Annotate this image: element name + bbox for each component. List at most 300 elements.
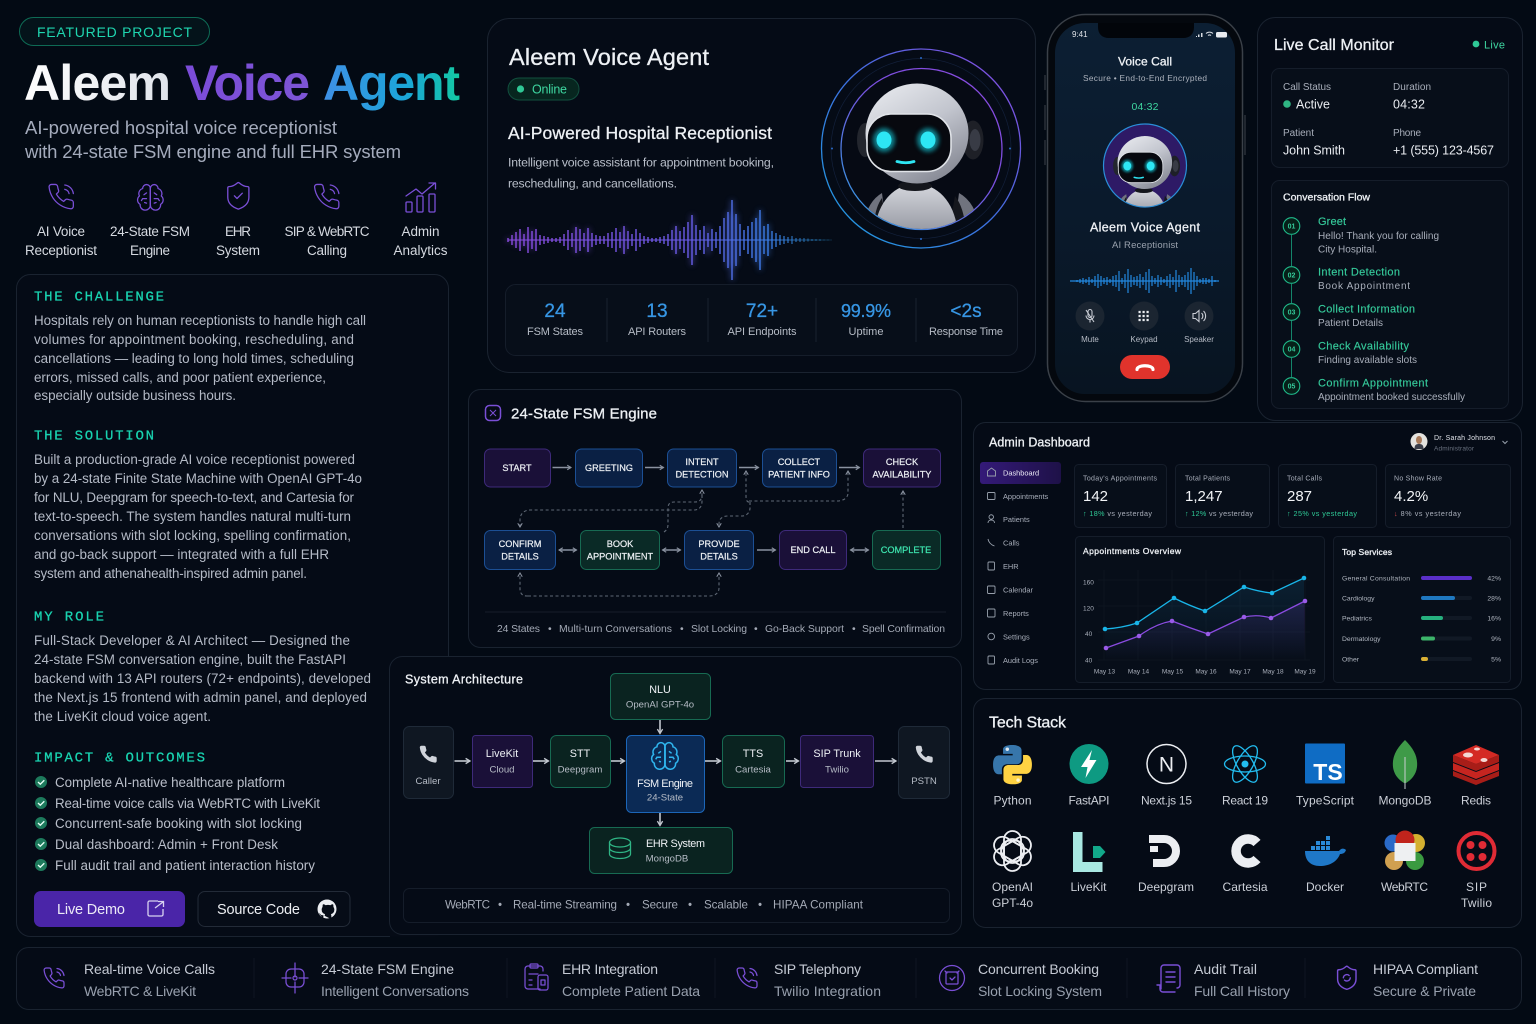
step 03 <box>1283 304 1415 329</box>
step 02: 02 <box>1288 272 1295 280</box>
list: outcomes: Full audit trail and patient interaction history <box>55 858 315 873</box>
state: check availability: CHECK <box>886 457 919 467</box>
sidebar: Dashboard <box>1003 468 1039 478</box>
chart: top services: 16% <box>1487 616 1501 622</box>
item: SIP telephony: Twilio Integration <box>774 983 881 999</box>
state: book appointment <box>580 530 660 570</box>
title: Voice <box>185 55 310 111</box>
label: FSM engine: Engine <box>130 243 170 258</box>
label: AI voice receptionist: Receptionist <box>25 243 97 258</box>
chart: top services <box>1334 536 1510 682</box>
call details: +1 (555) 123-4567 <box>1393 144 1494 158</box>
feature strip: Slot Locking <box>691 624 747 635</box>
feature strip: WebRTC <box>445 898 490 912</box>
Cartesia <box>1222 839 1268 894</box>
call header: Secure • End-to-End Encrypted <box>1083 73 1207 83</box>
icon: analytics <box>406 183 436 212</box>
stat: total calls: ↑ 25% vs yesterday <box>1287 509 1357 518</box>
step 02: Intent Detection <box>1318 266 1400 278</box>
step 01 <box>1283 216 1439 256</box>
label: SIP and WebRTC: Calling <box>307 243 347 258</box>
LiveKit: LiveKit <box>1070 880 1107 894</box>
OpenAI <box>991 831 1034 910</box>
list: outcomes: Real-time voice calls via WebRTC with LiveKit <box>55 796 320 811</box>
icon: FSM brain <box>138 185 163 210</box>
Twilio: Twilio <box>1461 896 1492 910</box>
Twilio: SIP <box>1466 880 1487 894</box>
text: solution body: text-to-speech. The system handles natural multi-turn <box>34 509 351 524</box>
panel: project narrative <box>16 274 448 936</box>
OpenAI: GPT-4o <box>992 896 1033 910</box>
chart: appointments overview: May 16 <box>1195 668 1217 676</box>
sidebar: Appointments <box>1003 492 1048 501</box>
node: NLU: NLU <box>649 684 671 696</box>
agent label: AI Receptionist <box>1112 240 1178 251</box>
node: STT: Deepgram <box>558 764 602 776</box>
control: mute: Mute <box>1081 335 1099 344</box>
stat: today's appointments: Today's Appointments <box>1083 476 1158 482</box>
step 04 <box>1283 340 1417 366</box>
stat: total patients: 1,247 <box>1185 488 1223 505</box>
panel: stats: API Endpoints <box>728 326 797 338</box>
item: FSM engine: Intelligent Conversations <box>321 983 469 999</box>
step 05: 05 <box>1288 384 1295 390</box>
feature strip: Real-time Streaming <box>513 898 617 912</box>
label: EHR system: EHR <box>225 224 251 239</box>
node: FSM engine: 24-State <box>647 792 683 804</box>
state: check availability: AVAILABILITY <box>873 470 931 480</box>
Redis <box>1453 745 1499 808</box>
call details: Active <box>1296 98 1330 112</box>
stat: no show rate <box>1386 464 1510 528</box>
call controls <box>1076 302 1214 344</box>
call details <box>1272 68 1508 168</box>
item: audit trail <box>1157 961 1290 999</box>
state: start <box>484 449 550 487</box>
stat: today's appointments: ↑ 18% vs yesterday <box>1083 509 1152 518</box>
chart: appointments overview: May 18 <box>1262 668 1284 676</box>
icon: database <box>610 838 630 858</box>
stat: total patients: Total Patients <box>1185 476 1230 482</box>
text: challenge body: especially outside business hours. <box>34 388 236 403</box>
button: source code <box>198 892 350 926</box>
label: admin analytics <box>394 224 448 258</box>
subtitle <box>24 117 401 162</box>
node: EHR system: EHR System <box>646 838 705 850</box>
node: STT <box>550 736 610 788</box>
subtitle: with 24-state FSM engine and full EHR system <box>24 141 401 162</box>
node: SIP trunk: Twilio <box>825 764 849 776</box>
stat: total calls: Total Calls <box>1287 476 1322 482</box>
call header: 04:32 <box>1132 101 1159 113</box>
panel: stats: Response Time <box>929 326 1003 338</box>
item: SIP telephony <box>737 961 881 999</box>
call details: Patient <box>1283 128 1314 139</box>
WebRTC <box>1381 830 1428 894</box>
state: start: START <box>502 463 532 473</box>
node: STT: STT <box>570 748 591 760</box>
text: role body: the Next.js 15 frontend with admin panel, and deployed <box>34 690 367 705</box>
Docker: Docker <box>1306 880 1344 894</box>
node: PSTN <box>898 726 950 798</box>
feature strip: • <box>626 898 630 912</box>
text: challenge body: errors, missed calls, and poor patient experience, <box>34 370 326 385</box>
state: complete: COMPLETE <box>881 545 931 555</box>
featured project badge <box>20 18 210 46</box>
text: role body: the LiveKit cloud voice agent. <box>34 709 211 724</box>
node: SIP trunk <box>800 736 874 788</box>
stat: today's appointments <box>1074 464 1166 528</box>
label: FSM engine: 24-State FSM <box>110 224 190 239</box>
chart: appointments overview <box>1076 536 1324 682</box>
feature strip: • <box>680 624 684 635</box>
live indicator: Live <box>1484 40 1505 52</box>
feature strip: Spell Confirmation <box>862 624 945 635</box>
label: EHR system: System <box>216 243 260 258</box>
text: solution body: and go-back support — integrated with a full EHR <box>34 547 329 562</box>
agent label <box>1090 220 1201 251</box>
panel: admin dashboard <box>974 422 1522 690</box>
state: collect patient info: COLLECT <box>778 457 821 467</box>
sidebar: Patients <box>1003 515 1030 524</box>
LiveKit <box>1070 832 1107 894</box>
node: TTS: TTS <box>743 748 763 760</box>
stat: no show rate: No Show Rate <box>1394 476 1442 482</box>
feature strip: Multi-turn Conversations <box>559 624 672 635</box>
item: EHR integration <box>525 961 700 999</box>
state: provide details <box>684 530 754 570</box>
node: EHR system: MongoDB <box>646 854 688 864</box>
chart: appointments overview: 120 <box>1083 606 1094 612</box>
conversation flow: Conversation Flow <box>1283 192 1370 204</box>
feature strip: Secure <box>642 898 678 912</box>
stat: response time: <2s <box>950 301 982 322</box>
item: FSM engine <box>282 961 469 999</box>
control: keypad: Keypad <box>1130 335 1158 344</box>
state: greeting: GREETING <box>585 463 633 473</box>
user profile: Dr. Sarah Johnson <box>1434 435 1495 442</box>
heading: my role: MY ROLE <box>34 610 104 626</box>
chart: top services: 42% <box>1487 576 1501 582</box>
TypeScript: TypeScript <box>1296 794 1355 808</box>
state: end call: END CALL <box>791 545 835 555</box>
call details: John Smith <box>1283 144 1345 158</box>
agent label: Aleem Voice Agent <box>1090 220 1201 234</box>
text: solution body: conversations with slot locking, spelling confirmation, <box>34 528 351 543</box>
panel: live call monitor <box>1258 18 1522 420</box>
list: outcomes <box>35 775 320 873</box>
chart: top services: General Consultation <box>1342 576 1410 582</box>
icon: github <box>318 900 336 919</box>
stat: no show rate: ↓ 8% vs yesterday <box>1394 509 1461 518</box>
item: concurrent booking: Concurrent Booking <box>978 961 1099 977</box>
item: HIPAA compliant <box>1338 961 1478 999</box>
panel: hero agent card <box>488 18 1036 372</box>
stat: API routers: 13 <box>646 301 668 322</box>
panel: stats: API Routers <box>628 326 686 338</box>
node: NLU: OpenAI GPT-4o <box>626 700 694 710</box>
feature strip: • <box>754 624 758 635</box>
label: SIP and WebRTC <box>284 224 370 258</box>
FastAPI: FastAPI <box>1068 794 1110 808</box>
call details: Call Status <box>1283 82 1331 93</box>
chart: appointments overview: May 17 <box>1229 668 1251 676</box>
call header <box>1083 54 1207 113</box>
stat: uptime: 99.9% <box>841 301 891 321</box>
panel: stats: Uptime <box>848 326 884 338</box>
Docker <box>1305 836 1346 894</box>
control: speaker: Speaker <box>1184 335 1214 344</box>
chart: appointments overview: 40 <box>1085 631 1093 638</box>
chart: appointments overview: 40 <box>1085 658 1093 664</box>
text: solution body <box>34 452 362 581</box>
subtitle: AI-powered hospital voice receptionist <box>25 117 337 138</box>
state: provide details: PROVIDE <box>698 539 740 549</box>
title: Aleem <box>24 55 171 111</box>
Next.js <box>1141 744 1192 808</box>
text: description: rescheduling, and cancellations. <box>508 176 677 190</box>
user profile: Administrator <box>1434 446 1475 452</box>
feature strip: • <box>852 624 856 635</box>
badge: online <box>508 78 579 100</box>
text: challenge body <box>34 313 366 403</box>
feature strip: • <box>758 898 762 912</box>
step 03: 03 <box>1288 310 1295 316</box>
state: confirm details: DETAILS <box>501 552 539 562</box>
text: role body: backend with 13 API routers (72+ endpoints), developed <box>34 671 371 686</box>
state: intent detection: DETECTION <box>675 470 729 480</box>
python <box>993 745 1032 808</box>
node: PSTN: PSTN <box>911 776 937 787</box>
item: HIPAA compliant: HIPAA Compliant <box>1373 961 1478 977</box>
waveform <box>508 200 832 280</box>
chart: top services: 9% <box>1491 636 1501 643</box>
call details: Duration <box>1393 82 1431 93</box>
step 05: Confirm Appointment <box>1318 378 1428 390</box>
icon: EHR shield <box>228 183 249 209</box>
item: voice calls <box>44 961 215 999</box>
hang up button <box>1120 355 1170 379</box>
Cartesia: Cartesia <box>1222 880 1268 894</box>
feature strip: HIPAA Compliant <box>773 898 864 912</box>
label: FSM engine <box>110 224 190 258</box>
feature strip: • <box>498 898 502 912</box>
button: live demo <box>34 891 185 927</box>
button: source code: Source Code <box>217 902 300 918</box>
step 05 <box>1283 378 1465 403</box>
state: end call <box>780 530 846 570</box>
text: solution body: by a 24-state Finite State Machine with OpenAI GPT-4o <box>34 471 362 486</box>
step 02: Book Appointment <box>1318 281 1410 292</box>
state: complete <box>872 530 940 570</box>
text: role body: 24-state FSM conversation engine, built the FastAPI <box>34 652 346 667</box>
node: TTS <box>722 736 784 788</box>
feature strip <box>485 612 946 635</box>
chart: appointments overview: May 15 <box>1162 668 1184 676</box>
step 04: Check Availability <box>1318 340 1410 352</box>
text: challenge body: volumes for appointment booking, rescheduling, and <box>34 332 354 347</box>
featured project badge: FEATURED PROJECT <box>37 24 192 40</box>
item: HIPAA compliant: Secure & Private <box>1373 983 1476 999</box>
chart: top services: 5% <box>1491 656 1501 664</box>
node: caller: Caller <box>415 776 441 787</box>
arrows: dashed go-back transitions <box>520 471 903 596</box>
text: challenge body: Hospitals rely on human receptionists to handle high call <box>34 313 366 328</box>
step 03: Patient Details <box>1318 318 1383 329</box>
sidebar: EHR <box>1003 562 1019 571</box>
heading: Live Call Monitor <box>1274 37 1395 54</box>
step 01: Hello! Thank you for calling <box>1318 231 1439 242</box>
state: intent detection: INTENT <box>685 457 719 467</box>
feature strip: 24 States <box>497 624 540 635</box>
Next.js: N <box>1159 754 1174 776</box>
panel: feature bar <box>16 948 1522 1010</box>
TypeScript <box>1296 744 1355 808</box>
Twilio <box>1458 833 1494 910</box>
panel: stats: FSM States <box>527 326 584 338</box>
feature strip <box>404 888 950 922</box>
heading: Tech Stack <box>989 714 1067 732</box>
subheading: AI-Powered Hospital Receptionist <box>508 123 772 143</box>
panel: FSM engine <box>468 390 962 648</box>
feature strip: Go-Back Support <box>765 624 844 635</box>
list: outcomes: Concurrent-safe booking with slot locking <box>55 816 302 831</box>
sidebar: Calls <box>1003 538 1020 548</box>
item: FSM engine: 24-State FSM Engine <box>321 961 454 977</box>
item: SIP telephony: SIP Telephony <box>774 961 861 977</box>
chart: top services: Top Services <box>1342 547 1392 557</box>
state: collect patient info: PATIENT INFO <box>768 470 830 480</box>
icon: AI voice receptionist <box>49 184 73 209</box>
status bar: 9:41 <box>1072 30 1088 39</box>
heading: impact and outcomes: IMPACT & OUTCOMES <box>34 750 205 766</box>
title <box>24 55 460 111</box>
text: description: Intelligent voice assistant for appointment booking, <box>508 156 774 170</box>
feature icon row <box>25 183 448 258</box>
step 04: Finding available slots <box>1318 355 1417 366</box>
React: React 19 <box>1222 794 1268 808</box>
text: solution body: system and athenahealth-inspired admin panel. <box>34 566 307 581</box>
call header: Voice Call <box>1118 54 1172 68</box>
step 02 <box>1283 266 1410 292</box>
icon: FSM <box>486 406 500 420</box>
arrows: forward transitions <box>552 468 868 550</box>
text: description <box>508 156 774 190</box>
list: outcomes: Complete AI-native healthcare platform <box>55 775 285 790</box>
chart: top services: 28% <box>1487 596 1501 602</box>
panel: system architecture <box>390 656 962 934</box>
MongoDB <box>1378 740 1432 808</box>
WebRTC: WebRTC <box>1381 880 1428 894</box>
label: SIP and WebRTC: SIP & WebRTC <box>284 224 370 239</box>
node: SIP trunk: SIP Trunk <box>813 748 861 760</box>
state: collect patient info <box>762 449 836 487</box>
item: audit trail: Audit Trail <box>1194 961 1257 977</box>
live indicator <box>1473 40 1505 52</box>
OpenAI: OpenAI <box>992 880 1033 894</box>
chart: top services: Dermatology <box>1342 636 1381 643</box>
list: outcomes: Dual dashboard: Admin + Front Desk <box>55 837 278 852</box>
text: challenge body: cancellations — leading to long hold times, scheduling <box>34 351 354 366</box>
stat: total patients: ↑ 12% vs yesterday <box>1185 509 1253 518</box>
button: live demo: Live Demo <box>57 902 125 918</box>
state: check availability <box>864 449 940 487</box>
sidebar <box>980 462 1061 665</box>
phone notch <box>1098 23 1194 38</box>
node: FSM engine <box>626 736 704 812</box>
step 04: 04 <box>1288 346 1295 354</box>
label: EHR system <box>216 224 260 258</box>
item: concurrent booking: Slot Locking System <box>978 983 1102 999</box>
status bar <box>1072 30 1227 39</box>
chart: appointments overview: Appointments Overview <box>1083 546 1182 556</box>
stat: FSM states: 24 <box>544 301 566 322</box>
call details: 04:32 <box>1393 98 1425 112</box>
arrows: data flow <box>454 720 896 826</box>
label: admin analytics: Admin <box>402 224 440 239</box>
feature strip: • <box>688 898 692 912</box>
stat: today's appointments: 142 <box>1083 488 1108 505</box>
node: NLU <box>610 674 710 720</box>
stat: total patients <box>1176 464 1270 528</box>
step 05: Appointment booked successfully <box>1318 392 1465 403</box>
stat: total calls: 287 <box>1287 488 1312 505</box>
avatar <box>1102 123 1188 208</box>
node: LiveKit <box>472 736 532 788</box>
React <box>1222 742 1268 808</box>
label: AI voice receptionist: AI Voice <box>37 224 85 239</box>
python: Python <box>994 794 1032 808</box>
sidebar: Reports <box>1003 609 1029 618</box>
item: EHR integration: EHR Integration <box>562 961 658 977</box>
node: TTS: Cartesia <box>735 764 772 776</box>
item: voice calls: WebRTC & LiveKit <box>84 983 196 999</box>
node: LiveKit: LiveKit <box>486 748 518 760</box>
text: role body: Full-Stack Developer & AI Architect — Designed the <box>34 633 350 648</box>
chart: appointments overview: May 19 <box>1294 668 1316 676</box>
step 01: 01 <box>1288 224 1295 230</box>
stat: API endpoints: 72+ <box>746 301 778 322</box>
Redis: Redis <box>1461 794 1491 808</box>
chart: appointments overview: 160 <box>1083 580 1094 586</box>
heading: 24-State FSM Engine <box>511 406 657 422</box>
nav icons <box>988 468 996 664</box>
chart: top services: Cardiology <box>1342 596 1375 602</box>
MongoDB: MongoDB <box>1378 794 1432 808</box>
title: Agent <box>323 55 460 111</box>
chart: top services: Pediatrics <box>1342 616 1372 622</box>
item: EHR integration: Complete Patient Data <box>562 983 700 999</box>
FastAPI <box>1068 744 1110 808</box>
Next.js: Next.js 15 <box>1141 794 1192 808</box>
badge: online: Online <box>532 82 567 96</box>
sidebar: Audit Logs <box>1003 656 1038 665</box>
state: confirm details <box>484 530 556 570</box>
item: concurrent booking <box>940 961 1102 999</box>
phone mockup <box>1045 14 1245 402</box>
robot illustration with rings <box>822 49 1020 260</box>
state: provide details: DETAILS <box>700 552 738 562</box>
chart: appointments overview: May 13 <box>1094 668 1116 676</box>
call details: Phone <box>1393 128 1421 139</box>
text: solution body: Built a production-grade AI voice receptionist powered <box>34 452 355 467</box>
phone waveform <box>1070 268 1219 294</box>
step 01: Greet <box>1318 216 1346 228</box>
node: EHR system <box>590 828 732 874</box>
state: confirm details: CONFIRM <box>499 539 541 549</box>
Deepgram: Deepgram <box>1138 880 1194 894</box>
step 01: City Hospital. <box>1318 244 1377 256</box>
